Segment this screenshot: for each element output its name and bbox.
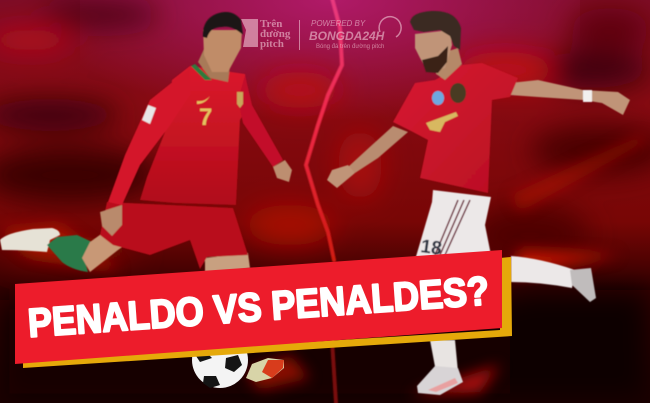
rear boot xyxy=(570,268,596,302)
front boot xyxy=(417,366,463,395)
white shorts xyxy=(415,190,491,260)
player: Ronaldo xyxy=(0,12,292,274)
logo: Trên đường pitch xyxy=(241,17,401,50)
face xyxy=(415,30,452,72)
beard xyxy=(422,46,448,73)
far boot xyxy=(0,228,60,252)
lightning line xyxy=(306,0,342,403)
jersey xyxy=(140,66,250,205)
player: Fernandes xyxy=(327,11,630,395)
logo: Trên đường pitch: BONGDA24H xyxy=(309,29,385,43)
rear leg sock xyxy=(511,256,575,288)
right arm xyxy=(238,75,283,167)
shorts xyxy=(100,202,248,269)
gold shadow xyxy=(23,257,512,368)
logo icon xyxy=(241,19,258,47)
boot beside ball xyxy=(246,358,284,382)
green sock xyxy=(47,235,92,272)
title text: PENALDO VS PENALDES? xyxy=(26,268,491,346)
logo: Trên đường pitch: đường xyxy=(260,28,291,40)
front leg sock xyxy=(430,340,458,372)
crest and sponsor xyxy=(450,83,466,103)
face xyxy=(203,30,242,72)
left arm xyxy=(108,68,190,205)
hair xyxy=(203,12,243,38)
collar xyxy=(191,64,212,80)
football xyxy=(192,332,248,388)
number 18: 18 xyxy=(419,236,443,260)
right arm xyxy=(510,80,630,115)
logo: Trên đường pitch: pitch xyxy=(260,38,284,50)
thigh and knee xyxy=(82,232,125,272)
neck xyxy=(198,40,232,82)
left arm xyxy=(348,126,408,173)
neck xyxy=(436,48,462,80)
red panel xyxy=(15,250,502,364)
hands xyxy=(100,205,122,236)
logo: Trên đường pitch: Bóng đá trên đường pitch xyxy=(316,44,384,50)
title banner xyxy=(15,250,512,368)
logo text: Trên xyxy=(260,18,282,30)
logo: Trên đường pitch: POWERED BY xyxy=(311,19,366,28)
jersey xyxy=(393,63,518,193)
hair xyxy=(410,11,461,50)
number and badges: 7 xyxy=(199,104,212,131)
